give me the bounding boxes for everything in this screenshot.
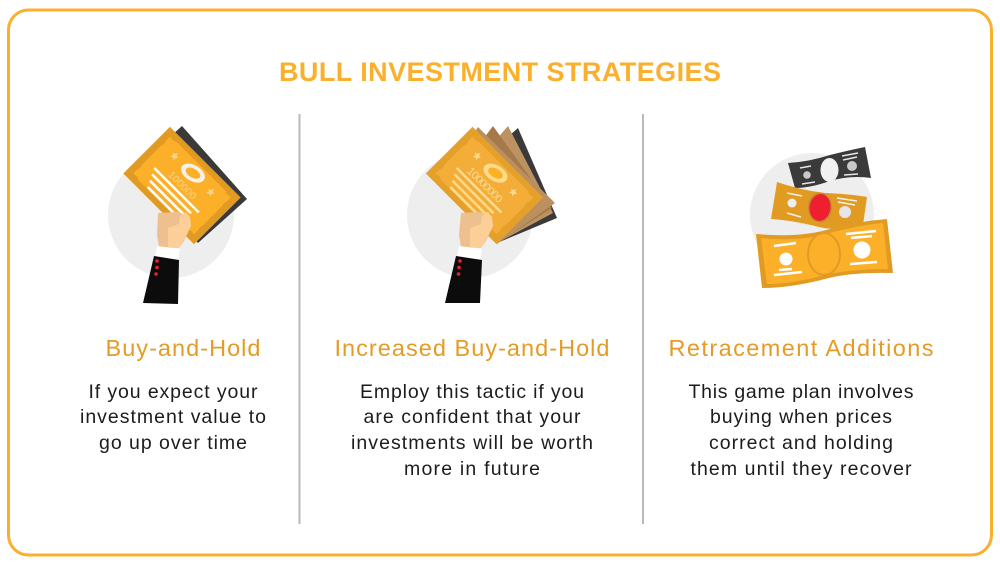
text block: buying when prices bbox=[710, 406, 892, 428]
icon: hand holding a fan of certificates: 10000000 bbox=[464, 165, 505, 206]
icon: hand holding a single certificate: 100000 bbox=[165, 170, 198, 202]
text block bbox=[351, 381, 593, 480]
large orange banknote bbox=[756, 219, 893, 288]
text block: If you expect your bbox=[88, 381, 258, 403]
text block bbox=[688, 381, 914, 480]
text block bbox=[80, 381, 266, 454]
text block: them until they recover bbox=[690, 458, 912, 480]
title: BULL INVESTMENT STRATEGIES bbox=[279, 57, 721, 87]
dark banknote bbox=[788, 147, 871, 188]
text block: investments will be worth bbox=[351, 432, 593, 454]
text block: are confident that your bbox=[364, 406, 581, 428]
text block: investment value to bbox=[80, 406, 266, 428]
panel: retracement additions bbox=[668, 147, 934, 480]
text block: go up over time bbox=[99, 432, 247, 454]
text block: more in future bbox=[404, 458, 540, 480]
heading: Retracement Additions bbox=[668, 335, 934, 361]
heading: Buy-and-Hold bbox=[106, 335, 260, 361]
panel: increased buy-and-hold bbox=[334, 126, 610, 480]
heading: Increased Buy-and-Hold bbox=[334, 335, 610, 361]
panel: buy-and-hold bbox=[80, 126, 266, 454]
text block: Employ this tactic if you bbox=[360, 381, 584, 403]
icon: hand holding a single certificate bbox=[108, 126, 247, 304]
text block: correct and holding bbox=[709, 432, 893, 454]
icon: stack of banknotes bbox=[750, 147, 893, 288]
orange banknote with red centre bbox=[771, 182, 867, 229]
icon: hand holding a fan of certificates bbox=[407, 126, 557, 303]
text block: This game plan involves bbox=[688, 381, 914, 403]
